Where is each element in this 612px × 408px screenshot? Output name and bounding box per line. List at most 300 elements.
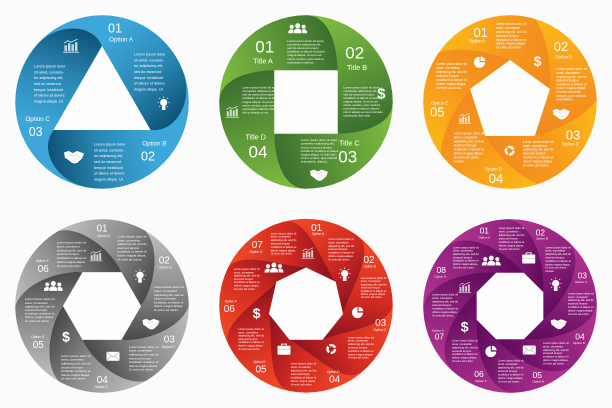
panel: Option A [59, 219, 155, 306]
title Option C: Option C [373, 328, 387, 332]
text block D: amet, consetetur [454, 136, 478, 140]
number 02: 02 [536, 227, 545, 237]
text block 07: Lorem ipsum dolor sit [271, 231, 297, 235]
text block 06: Ut enim ad minim. [452, 359, 474, 363]
panel: Option A [446, 219, 544, 292]
text block B: exercitation. [556, 98, 574, 102]
text block 04: dolore magna aliqua. [291, 379, 316, 383]
text block 02: incididunt ut labore et [545, 259, 571, 263]
blade A [36, 15, 186, 130]
icon: light bulb [134, 269, 146, 283]
text block D: magna aliqua. Ut enim ad [242, 100, 277, 104]
text block 05: Lorem ipsum dolor sit [238, 327, 264, 331]
blade D [219, 70, 306, 189]
text block 04: amet, consetetur [291, 365, 311, 369]
text block 06: amet, consetetur [234, 270, 254, 274]
text block 03: Ut enim ad minim. [568, 312, 590, 316]
text block 04: eiusmod tempor [291, 372, 310, 376]
text block 02: amet, consetetur [154, 289, 177, 293]
center hole: pentagon [470, 60, 550, 136]
text block E: dolore magna aliqua. [436, 82, 466, 86]
text block 05: Ut enim ad minim. [25, 319, 50, 323]
text block D: sed do eiusmod tempor [242, 93, 274, 97]
text block 01: amet, consetetur [117, 238, 140, 242]
icon: donut chart [328, 345, 335, 353]
text block 02: eiusmod tempor [545, 256, 565, 260]
text block 05: adipiscing elit, sed do [498, 366, 524, 370]
text block 05: amet, consetetur [238, 330, 258, 334]
blade 03 [76, 268, 199, 395]
text block 05: amet, consetetur [25, 301, 48, 305]
text block 04: Lorem ipsum dolor sit [543, 341, 569, 345]
panel: Option D [426, 89, 560, 214]
text block 03: Lorem ipsum dolor sit [348, 335, 374, 339]
text block 02: dolore magna aliqua. [154, 304, 183, 308]
text block 02: dolore magna aliqua. [545, 262, 571, 266]
number 01: 01 [96, 224, 108, 234]
text block 04: Ut enim ad minim. [543, 361, 565, 365]
text block D: veniam. [454, 160, 465, 164]
title Option F: Option F [225, 299, 237, 303]
text block A: sed do eiusmod tempor [287, 46, 319, 50]
disc: blue rim [15, 15, 189, 189]
text block C: tempor incididunt [34, 88, 64, 92]
diagram: red heptagon cycle [191, 191, 414, 408]
panel: Option A [36, 15, 186, 130]
text block 05: dolore magna aliqua. [498, 376, 523, 380]
text block D: consetetur adipiscing elit, [242, 89, 276, 93]
text block 07: adipiscing elit, sed do [271, 238, 297, 242]
blade A [219, 15, 338, 102]
text block 04: Lorem ipsum dolor sit [61, 354, 91, 358]
text block C: incididunt ut labore et [523, 156, 553, 160]
text block 05: incididunt ut labore et [498, 373, 524, 377]
panel: Option E [217, 282, 301, 402]
icon: briefcase [522, 253, 535, 264]
text block D: minim veniam, quis nostrud [242, 103, 279, 107]
text block 02: Ut enim ad minim [545, 266, 567, 270]
text block 01: incididunt ut labore et [499, 240, 525, 244]
text block E: adipiscing elit, sed do [436, 70, 467, 74]
blade B [306, 15, 393, 134]
text block 06: Ut enim ad minim. [234, 287, 256, 291]
text block C: Lorem ipsum dolor sit [523, 140, 554, 144]
text block A: Lorem ipsum dolor sit [496, 22, 527, 26]
panel: Option D [496, 271, 612, 391]
text block B: ut labore et dolore [94, 172, 125, 176]
text block B: incididunt ut labore et [556, 82, 587, 86]
panel: Option G [423, 272, 496, 370]
number 01: 01 [311, 223, 323, 234]
panel: Option G [227, 221, 336, 282]
blade 06 [425, 292, 545, 408]
icon: dollar: $ [377, 86, 386, 103]
icon: people [264, 263, 284, 272]
panel: Option C [290, 292, 414, 394]
center hole: square [274, 70, 338, 134]
text block A: amet, consetetur [496, 26, 521, 30]
text block A: eiusmod tempor [496, 34, 520, 38]
text block 03: adipiscing elit, sed do [568, 298, 594, 302]
icon: bar chart [302, 248, 314, 258]
blade A [439, 15, 550, 89]
blade 05 [1, 260, 124, 387]
title Option G: Option G [250, 250, 263, 254]
text block A: Ut enim ad minim. [496, 46, 522, 50]
blade 02 [80, 225, 203, 352]
text block D: Lorem ipsum dolor sit [454, 132, 484, 136]
number 08: 08 [437, 265, 446, 275]
text block B: sed do eiusmod tempor [343, 92, 375, 96]
text block 05: Ut enim ad minim. [498, 380, 520, 384]
panel: Option B [80, 225, 203, 352]
text block 01: amet, consetetur [499, 230, 519, 234]
icon: handshake [64, 151, 84, 164]
title Option A: Option A [469, 39, 486, 44]
number 03: 03 [338, 148, 357, 167]
text block C: magna aliqua. Ut enim ad [301, 152, 335, 156]
text block A: adipiscing elit, sed do [496, 30, 527, 34]
text block 02: incididunt ut labore et [361, 289, 387, 293]
text block E: Lorem ipsum dolor sit [436, 62, 467, 66]
text block 04: eiusmod tempor [61, 365, 83, 369]
text block 03: incididunt ut labore et [348, 349, 374, 353]
title Option E: Option E [431, 100, 448, 105]
title Option C: Option C [575, 280, 588, 284]
text block D: adipiscing elit, sed do [454, 140, 484, 144]
icon: bar chart [63, 39, 79, 52]
text block 04: incididunt ut labore et [291, 375, 317, 379]
title Option F: Option F [36, 259, 49, 263]
panel: Option F [5, 217, 128, 344]
blade 03 [290, 292, 414, 394]
number 02: 02 [363, 255, 375, 266]
text block E: Ut enim ad minim. [436, 86, 462, 90]
text block 06: dolore magna aliqua. [57, 260, 86, 264]
text block 07: eiusmod tempor [432, 303, 452, 307]
text block B: consetetur adipiscing elit, [343, 89, 377, 93]
text block A: tempor incididunt [134, 76, 164, 80]
panel: Option E [406, 37, 510, 166]
text block C: Lorem ipsum dolor sit amet, [301, 138, 338, 142]
disc: green rim [219, 15, 393, 189]
panel: Option E [476, 320, 574, 393]
text block 01: Ut enim ad minim. [499, 247, 521, 251]
blade 07 [423, 272, 496, 370]
number 06: 06 [38, 264, 49, 275]
icon: light bulb [550, 278, 562, 291]
blade 04 [496, 271, 612, 391]
number 04: 04 [575, 332, 585, 342]
diagram: green square cycle [219, 15, 393, 189]
text block B: Lorem ipsum dolor sit [556, 67, 587, 71]
text block 05: eiusmod tempor [25, 308, 47, 312]
icon: people [288, 23, 307, 33]
number 03: 03 [375, 318, 387, 329]
text block B: dolore magna aliqua. [556, 86, 586, 90]
blade 06 [5, 217, 128, 344]
text block D: dolore magna aliqua. [454, 152, 484, 156]
number 03: 03 [578, 271, 587, 281]
text block B: sit amet, consete- [94, 148, 125, 152]
text block 02: eiusmod tempor [361, 286, 380, 290]
text block 01: dolore magna aliqua. [117, 254, 146, 258]
text block C: Ut enim ad minim. [523, 163, 549, 167]
text block 03: eiusmod tempor [568, 302, 587, 306]
text block 02: Ut enim ad minim. [154, 308, 179, 312]
number 03: 03 [566, 128, 580, 143]
text block 01: Lorem ipsum dolor sit [499, 226, 525, 230]
text block 03: Lorem ipsum dolor sit [129, 345, 159, 349]
panel: Option B [500, 8, 605, 136]
text block 03: adipiscing elit, sed do [348, 342, 374, 346]
text block 05: Ut enim ad minim. [238, 347, 260, 351]
diagram: blue triangle cycle [0, 15, 210, 218]
title Option A: Option A [479, 235, 490, 239]
text block 03: Ut enim ad minim. [129, 368, 154, 372]
text block 01: dolore magna aliqua. [499, 244, 524, 248]
text block B: consequat duis aute. [343, 113, 371, 117]
text block 04: dolore magna aliqua. [543, 358, 568, 362]
text block C: exercitation ullamco. [301, 160, 328, 164]
icon: pie chart [485, 346, 497, 357]
blade 04 [49, 306, 145, 393]
title Option B: Option B [536, 236, 548, 240]
text block 04: Lorem ipsum dolor sit [291, 361, 317, 365]
blade 05 [476, 320, 574, 393]
text block A: magna aliqua. Ut. [134, 88, 164, 92]
text block 02: Ut enim ad minim. [361, 295, 383, 299]
icon: light bulb [158, 96, 170, 110]
text block 08: incididunt ut labore et [453, 259, 479, 263]
text block B: tempor incididunt [94, 166, 124, 170]
text block 06: incididunt ut labore et [57, 256, 86, 260]
text block 04: amet, consetetur [543, 344, 563, 348]
title Option H: Option H [434, 274, 446, 278]
number 04: 04 [97, 375, 108, 386]
panel: Option D [49, 306, 145, 393]
blade 08 [403, 221, 524, 341]
title Option E: Option E [532, 379, 544, 383]
text block 04: adipiscing elit, sed do [61, 362, 91, 366]
icon: people [44, 281, 63, 291]
disc: gray rim [15, 219, 189, 393]
blade 04 [243, 314, 367, 408]
panel: Option C [485, 71, 612, 196]
text block 06: eiusmod tempor [57, 252, 79, 256]
text block 04: Ut enim ad minim. [291, 382, 313, 386]
text block A: minim veniam, quis nostrud [287, 57, 324, 61]
text block 03: adipiscing elit, sed do [129, 352, 159, 356]
number 03: 03 [164, 334, 175, 346]
panel: Title C [274, 102, 393, 189]
text block C: minim veniam, quis nostrud [301, 156, 338, 160]
blade 02 [475, 199, 595, 320]
text block 01: dolore magna aliqua. [328, 254, 354, 258]
text block B: Ut enim ad minim [556, 90, 581, 94]
number 05: 05 [533, 370, 542, 380]
panel: Option C [76, 268, 199, 395]
center hole: heptagon [269, 268, 343, 340]
icon: briefcase [278, 344, 290, 355]
title Option E: Option E [31, 335, 45, 339]
blade 05 [217, 282, 301, 402]
title Option E: Option E [253, 360, 266, 364]
text block 07: Lorem ipsum dolor sit [432, 293, 458, 297]
text block B: Lorem ipsum dolor sit amet, [343, 85, 380, 89]
number 03: 03 [29, 125, 43, 139]
panel: Option D [243, 314, 367, 408]
icon: bar chart [90, 250, 102, 261]
panel: Title B [306, 15, 393, 134]
icon: pie chart [474, 56, 485, 68]
text block A: ut labore et dolore [134, 82, 165, 86]
text block 07: Ut enim ad minim. [271, 252, 293, 256]
icon: dollar: $ [253, 305, 261, 321]
text block 07: dolore magna aliqua. [271, 248, 296, 252]
text block B: incididunt ut labore et dolore [343, 96, 381, 100]
blade E [406, 37, 510, 166]
icon: bar chart [458, 282, 471, 292]
text block C: tur adipiscing elit, [34, 76, 63, 80]
text block C: consetetur adipiscing elit, [301, 142, 335, 146]
icon: dollar: $ [62, 329, 70, 345]
text block 03: dolore magna aliqua. [129, 364, 158, 368]
title Option C: Option C [562, 142, 579, 147]
number 01: 01 [255, 38, 274, 57]
title Option G: Option G [432, 328, 445, 332]
disc: yellow rim [423, 15, 597, 189]
text block C: amet, consetetur [523, 144, 548, 148]
panel: Option A [275, 191, 390, 314]
text block B: amet, consetetur [556, 71, 581, 75]
text block 02: eiusmod tempor [154, 297, 176, 301]
title Option B: Option B [158, 266, 172, 270]
text block 07: Ut enim ad minim. [432, 314, 454, 318]
title D: Title D [245, 132, 266, 141]
title C: Title C [339, 138, 360, 147]
text block 05: Lorem ipsum dolor sit [25, 297, 55, 301]
number 02: 02 [141, 150, 155, 164]
panel: Option B [475, 199, 595, 320]
text block 04: incididunt ut labore et [61, 369, 91, 373]
text block 01: eiusmod tempor [328, 247, 348, 251]
text block E: eiusmod tempor [436, 74, 460, 78]
icon: envelope [523, 346, 536, 354]
text block 03: eiusmod tempor [129, 356, 151, 360]
text block D: incididunt ut labore et [454, 148, 484, 152]
text block C: sed do eiusmod [34, 82, 61, 86]
text block 04: amet, consetetur [61, 358, 84, 362]
icon: people [482, 256, 501, 266]
text block D: Ut enim ad minim [454, 156, 479, 160]
text block 02: adipiscing elit, sed do [361, 282, 387, 286]
text block A: magna aliqua. Ut enim ad [287, 53, 322, 57]
text block B: magna aliqua. Ut enim ad [343, 99, 378, 103]
icon: handshake [553, 109, 570, 120]
icon: bar chart [458, 113, 471, 124]
text block B: Lorem ipsum dolor [94, 142, 126, 146]
panel: Option F [425, 292, 545, 408]
text block 06: amet, consetetur [452, 342, 472, 346]
text block B: adipiscing elit, sed do [556, 75, 587, 79]
text block 04: Ut enim ad minim. [61, 377, 86, 381]
title Option D: Option D [573, 341, 586, 345]
number 06: 06 [224, 304, 235, 315]
text block 03: amet, consetetur [568, 295, 588, 299]
blade 01 [446, 219, 544, 292]
text block 06: Lorem ipsum dolor sit [452, 339, 478, 343]
text block A: dolore magna aliqua. [496, 42, 526, 46]
blade 03 [524, 242, 597, 340]
number 02: 02 [554, 39, 568, 54]
title Option D: Option D [485, 167, 502, 172]
text block D: eiusmod tempor [454, 144, 477, 148]
panel: Option C [524, 242, 597, 340]
text block C: incididunt ut labore et dolore [301, 149, 339, 153]
text block 06: amet, consetetur [57, 244, 80, 248]
text block 03: incididunt ut labore et [568, 305, 594, 309]
text block D: nisi ut aliquip ex ea. [242, 111, 269, 115]
text block B: tur adipiscing elit, [94, 154, 123, 158]
text block C: adipiscing elit, sed do [523, 148, 554, 152]
text block 06: eiusmod tempor [452, 349, 471, 353]
diagram: purple octagon cycle [403, 199, 612, 408]
text block C: Lorem ipsum dolor [34, 64, 66, 68]
text block 05: adipiscing elit, sed do [238, 334, 265, 338]
title Option C: Option C [25, 116, 50, 123]
text block 02: Lorem ipsum dolor sit [545, 245, 571, 249]
text block 06: dolore magna aliqua. [234, 284, 259, 288]
text block 02: Lorem ipsum dolor sit [154, 285, 184, 289]
number 05: 05 [430, 105, 445, 120]
disc: purple rim [423, 219, 597, 393]
blade C [274, 102, 393, 189]
text block 08: dolore magna aliqua. [453, 262, 478, 266]
center hole: triangle [54, 46, 150, 130]
text block B: minim veniam, quis nostrud [343, 103, 380, 107]
text block 02: adipiscing elit, sed do [545, 252, 572, 256]
text block A: exercitation ullamco. [287, 60, 315, 64]
text block B: exercitation ullamco laboris [343, 106, 380, 110]
number 04: 04 [249, 143, 267, 162]
number 02: 02 [345, 44, 364, 63]
text block 03: amet, consetetur [129, 349, 152, 353]
text block B: sed do eiusmod [94, 160, 121, 164]
diagram: orange pentagon cycle [406, 8, 612, 214]
text block 07: adipiscing elit, sed do [432, 300, 459, 304]
text block 08: adipiscing elit, sed do [453, 252, 479, 256]
text block 06: adipiscing elit, sed do [234, 274, 260, 278]
text block D: Lorem ipsum dolor sit amet, [242, 85, 279, 89]
text block 05: Lorem ipsum dolor sit [498, 359, 524, 363]
panel: Option B [35, 30, 210, 218]
panel: Option F [191, 230, 306, 353]
text block C: eiusmod tempor [523, 152, 547, 156]
title Option D: Option D [327, 370, 340, 374]
text block 06: incididunt ut labore et [234, 280, 260, 284]
text block 06: Lorem ipsum dolor sit [234, 267, 260, 271]
text block 05: incididunt ut labore et [238, 340, 264, 344]
number 01: 01 [480, 226, 489, 236]
text block 05: eiusmod tempor [498, 369, 517, 373]
title Option A: Option A [109, 36, 134, 44]
text block 02: incididunt ut labore et [154, 300, 184, 304]
text block 03: incididunt ut labore et [129, 360, 159, 364]
icon: handshake [142, 319, 160, 330]
center hole: octagon [477, 273, 543, 339]
blade 06 [191, 230, 306, 353]
